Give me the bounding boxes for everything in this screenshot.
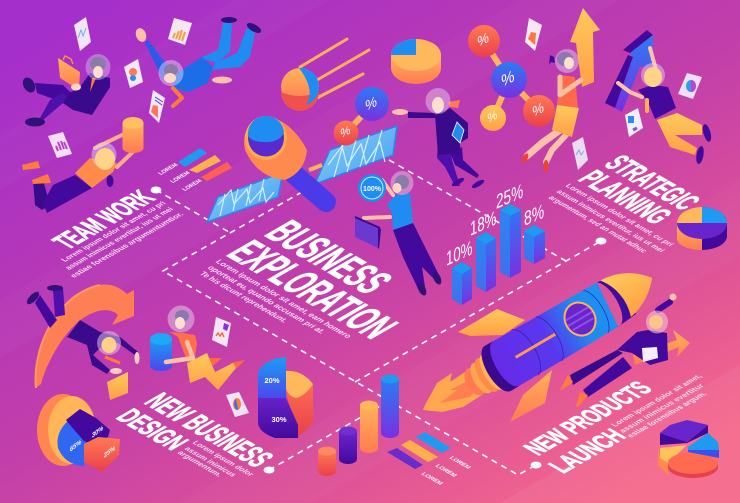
rocket seams bbox=[511, 285, 615, 375]
solar panel right bbox=[315, 126, 397, 184]
text: new business body: Lorem ipsum dolor bbox=[190, 439, 256, 478]
rocket bottom fin bbox=[510, 370, 552, 422]
icon: yellow product arrow bbox=[633, 330, 690, 365]
panel: new business design bbox=[25, 285, 472, 486]
rocket nose bbox=[600, 257, 664, 321]
bars: lorem mini legend: LOREM bbox=[170, 171, 192, 184]
heading: business exploration: EXPLORATION bbox=[216, 233, 409, 345]
heading: new business design bbox=[109, 388, 282, 472]
rocket window bbox=[559, 297, 602, 341]
bar 8% bbox=[524, 225, 545, 264]
person: woman with arrow bbox=[618, 48, 713, 164]
percentage labels: 18% bbox=[470, 206, 496, 241]
briefcase bbox=[107, 372, 128, 400]
illustration: percent balls small: % bbox=[365, 92, 377, 114]
heading: new products launch: LAUNCH bbox=[542, 425, 632, 477]
illustration: molecule percent balls: % bbox=[501, 67, 515, 91]
person: woman in suit with tablet bbox=[392, 88, 485, 190]
rocket stripe bbox=[515, 333, 556, 359]
person: astronaut with tablet bbox=[560, 294, 676, 407]
illustration: molecule percent balls: % bbox=[487, 107, 498, 126]
donut side bbox=[286, 371, 313, 436]
illustration: satellite ball with streaks bbox=[281, 39, 369, 111]
bars: lorem mini legend: LOREM bbox=[182, 179, 204, 192]
paper chart E bbox=[48, 132, 72, 158]
text: team work body: assum inimicus evertitur, ius ut mei bbox=[63, 206, 176, 271]
person: woman in skirt bbox=[520, 49, 581, 172]
rocket body bbox=[475, 281, 622, 396]
rocket dark collar bbox=[593, 273, 637, 327]
paper chart F bbox=[525, 18, 542, 51]
bar 10% bbox=[452, 262, 472, 305]
briefcase bbox=[58, 56, 80, 90]
satellite body bbox=[244, 116, 307, 180]
text: new products body: estiae forensibus argum. bbox=[625, 390, 709, 439]
illustration: molecule percent balls bbox=[468, 25, 555, 131]
person: woman with cylinder bbox=[22, 117, 144, 213]
person: astronaut with 100% disc bbox=[355, 171, 443, 297]
text: new business body: argumentum. bbox=[175, 449, 225, 478]
illustration: satellite bbox=[207, 116, 397, 222]
text: team work body: estiae forensibus argumentumtior. bbox=[68, 211, 186, 279]
rocket flame bbox=[423, 372, 485, 412]
paper chart H bbox=[625, 108, 643, 137]
panel: business exploration title bbox=[197, 213, 409, 345]
chart: donut with segments bbox=[37, 394, 120, 472]
text: strategic planning body: assum inimicus evertitur, ius ut mei bbox=[554, 188, 667, 254]
panel: new products launch bbox=[423, 255, 719, 478]
heading: new products launch bbox=[517, 377, 658, 477]
paper chart C bbox=[149, 90, 165, 123]
heading: business exploration: BUSINESS bbox=[254, 213, 404, 300]
cylinder purple bbox=[339, 426, 357, 464]
paper chart I bbox=[572, 137, 588, 170]
purple segment: 30% bbox=[271, 415, 287, 424]
bars: lorem mini legend lower: LOREM bbox=[447, 456, 472, 470]
rocket nozzle rings bbox=[457, 347, 514, 404]
paper chart B bbox=[124, 59, 143, 88]
text: new products body: assum inimicus evertitur bbox=[617, 382, 706, 434]
panel: team work bbox=[20, 17, 263, 279]
text: business exploration body: Te his dicunt reprehendunt. bbox=[197, 270, 291, 324]
bar 18% bbox=[476, 232, 496, 292]
cylinder bbox=[122, 117, 144, 153]
tablet bbox=[452, 122, 464, 143]
connector dots bbox=[150, 186, 606, 474]
heading: new products launch: NEW PRODUCTS bbox=[517, 377, 658, 459]
heading: team work: TEAM WORK bbox=[46, 186, 162, 254]
100% disc: 100% bbox=[363, 186, 382, 193]
illustration: percent balls small: % bbox=[340, 122, 351, 141]
segment 30%: 30% bbox=[92, 424, 104, 440]
chart: exploded pie bottom right bbox=[658, 420, 719, 478]
text: strategic planning body: argumentum, sed an mutat adhuc bbox=[546, 194, 650, 254]
person: woman with blue cylinder bbox=[150, 306, 245, 390]
person: man in blue bbox=[134, 17, 263, 106]
rocket top fin bbox=[458, 309, 525, 336]
tablet bbox=[642, 347, 658, 362]
text: new products body: Lorem ipsum dolor sit amet, bbox=[609, 373, 704, 428]
bars: lorem mini legend: LOREM bbox=[158, 163, 180, 176]
blue cylinder bbox=[150, 333, 172, 371]
solar panel left bbox=[207, 172, 283, 222]
chart: strategic pie bbox=[677, 207, 727, 250]
panel: strategic planning bbox=[520, 8, 727, 254]
text: business exploration body: oporteat eu, quando accusam pri at. bbox=[205, 264, 328, 335]
illustration: percent balls small bbox=[334, 87, 389, 146]
text: strategic planning body: Lorem ipsum dolor sit amet, cu pri bbox=[563, 182, 676, 248]
heading: business exploration bbox=[216, 213, 409, 345]
bars: lorem mini legend lower bbox=[387, 432, 472, 486]
bar 25% bbox=[500, 204, 521, 278]
text: new business body: assum inimicus bbox=[182, 445, 239, 478]
chart: cylinders bbox=[318, 374, 399, 476]
icon: curved orange arrow bbox=[36, 285, 134, 388]
paper chart K bbox=[226, 392, 249, 417]
chart: isometric bars with percentages bbox=[446, 179, 545, 305]
text: team work body: Lorem ipsum dolor sit amet, cu pri bbox=[59, 200, 168, 263]
chart: stacked pie bbox=[258, 357, 313, 438]
cylinder blue bbox=[381, 374, 399, 438]
segment 25%: 25% bbox=[104, 444, 116, 460]
blue segment: 20% bbox=[264, 376, 280, 385]
briefcase bbox=[355, 217, 381, 249]
illustration: molecule percent balls: % bbox=[532, 98, 544, 120]
paper chart A bbox=[74, 17, 91, 51]
person: man in suit with briefcase bbox=[20, 54, 110, 126]
illustration: molecule percent balls: % bbox=[477, 28, 489, 50]
bars: lorem mini legend bbox=[158, 148, 232, 192]
paper chart J bbox=[212, 317, 231, 347]
bars: lorem mini legend lower: LOREM bbox=[433, 464, 458, 478]
illustration: pie chart top bbox=[391, 39, 441, 84]
bars: lorem mini legend lower: LOREM bbox=[419, 472, 444, 486]
paper chart D bbox=[168, 18, 192, 45]
paper chart G bbox=[678, 73, 702, 99]
cylinder red bbox=[318, 446, 336, 476]
heading: strategic planning bbox=[571, 150, 708, 229]
segment 65%: 65% bbox=[70, 438, 82, 454]
illustration: rocket bbox=[423, 255, 665, 422]
percentage labels bbox=[446, 179, 544, 271]
cylinder orange bbox=[360, 400, 378, 453]
icon: yellow up arrow bbox=[570, 8, 600, 87]
percentage labels: 10% bbox=[446, 236, 472, 271]
dashed connector lines bbox=[156, 160, 601, 475]
percentage labels: 8% bbox=[524, 199, 544, 231]
person: man with briefcase bbox=[25, 285, 140, 400]
heading: new business design: DESIGN bbox=[109, 405, 195, 455]
percentage labels: 25% bbox=[496, 179, 523, 214]
text: business exploration body: Lorem ipsum dolor sit amet, eam homero bbox=[213, 258, 354, 340]
icon: purple up arrow bbox=[605, 30, 653, 112]
